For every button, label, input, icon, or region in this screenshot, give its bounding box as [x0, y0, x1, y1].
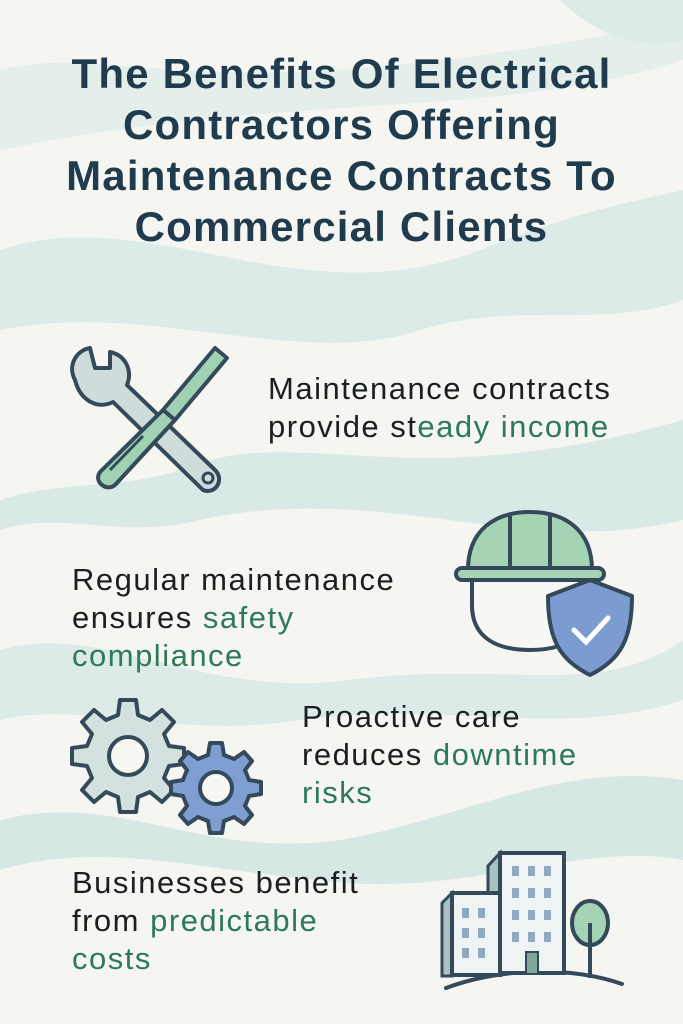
text: steady income: provide steady income [268, 409, 610, 444]
text: predictable costs: Businesses benefit [72, 865, 359, 900]
title: Commercial Clients [135, 203, 548, 250]
text: steady income [268, 371, 611, 444]
text: downtime risks: Proactive care [302, 699, 521, 734]
title: Contractors Offering [123, 101, 560, 148]
text: predictable costs [72, 865, 359, 976]
text: safety compliance: ensures safety [72, 600, 295, 635]
icon: wrench and screwdriver [70, 346, 230, 493]
icon: buildings and tree [440, 849, 624, 990]
text: predictable costs: costs [72, 941, 152, 976]
text: safety compliance: compliance [72, 638, 244, 673]
text: predictable costs: from predictable [72, 903, 318, 938]
text: safety compliance [72, 562, 395, 673]
title: Maintenance Contracts To [66, 152, 617, 199]
text: downtime risks [302, 699, 578, 810]
text: steady income: Maintenance contracts [268, 371, 611, 406]
title [66, 50, 617, 250]
text: downtime risks: risks [302, 775, 373, 810]
title: The Benefits Of Electrical [71, 50, 612, 97]
text: downtime risks: reduces downtime [302, 737, 578, 772]
icon: hard hat with shield [454, 510, 634, 677]
icon: gears [70, 698, 263, 835]
text: safety compliance: Regular maintenance [72, 562, 395, 597]
